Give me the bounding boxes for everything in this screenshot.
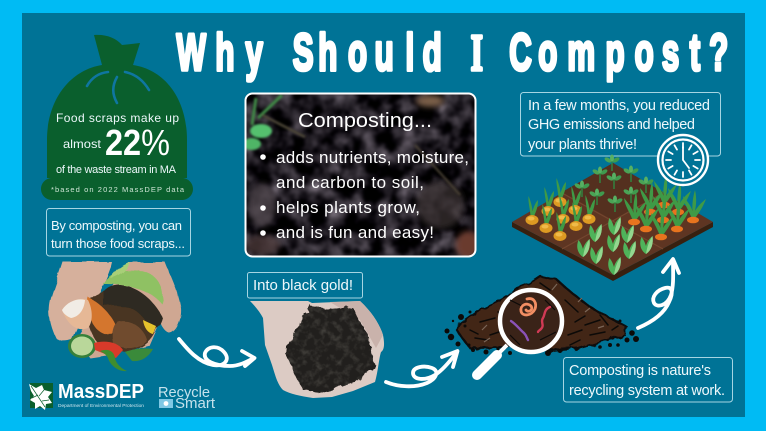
bullet list: and carbon to soil,: [276, 173, 424, 192]
onion plants: [526, 178, 596, 241]
logo: MassDEP: MassDEP: [58, 381, 144, 403]
carrot plants: [624, 175, 706, 240]
callout: into black gold: Into black gold!: [253, 277, 353, 294]
illustration: garden bed: [512, 154, 713, 281]
logo: RecycleSmart: Recycle: [158, 385, 210, 401]
food scraps: [87, 262, 164, 352]
bag shape: [41, 35, 193, 200]
bullet list: and is fun and easy!: [276, 223, 434, 242]
callout: by composting: By composting, you can: [51, 218, 182, 233]
scattered crumbs: [444, 310, 639, 356]
icon: clock: [658, 135, 708, 185]
seedling plants: [574, 154, 654, 212]
callout: in a few months: GHG emissions and helped: [528, 117, 695, 133]
panel: composting benefits: [243, 93, 480, 259]
bag footnote: *based on 2022 MassDEP data: [51, 185, 185, 194]
icon: green trash bag with statistic: [41, 35, 193, 200]
callout: by composting: [46, 208, 190, 256]
callout: nature's recycling system: recycling system at work.: [569, 383, 725, 399]
illustration: compost pile: [444, 276, 639, 375]
title: [176, 24, 728, 82]
title: Why: [177, 24, 263, 82]
magnifier lens: [500, 290, 562, 352]
red pepper: [94, 342, 123, 358]
soil cracks in lens: [510, 300, 556, 345]
compost mass: [285, 306, 375, 393]
yellow peel: [143, 320, 156, 334]
bullet list: helps plants grow,: [276, 198, 420, 217]
bag text: food scraps: Food scraps make up: [56, 111, 179, 125]
soil flecks: [470, 283, 618, 345]
eggshell: [62, 299, 92, 329]
arrow: black gold to compost pile: [386, 351, 458, 386]
callout: nature's recycling system: [564, 358, 732, 402]
title: Should: [293, 24, 442, 82]
callout: nature's recycling system: Composting is nature's: [569, 363, 711, 379]
green pepper: [100, 350, 127, 371]
callout: in a few months: your plants thrive!: [528, 137, 637, 153]
arrow: compost pile to garden: [638, 259, 679, 328]
statistic: 22 percent: 22%: [105, 122, 170, 163]
bullet list: adds nutrients, moisture,: [276, 148, 469, 167]
green scrap: [125, 348, 153, 361]
magnifier neck: [498, 345, 507, 354]
logo: RecycleSmart: [158, 385, 216, 412]
logo: MassDEP: Department of Environmental Protection: [58, 403, 145, 408]
cucumber slice: [68, 334, 96, 358]
bag crease highlights: [87, 72, 149, 103]
hands: [49, 262, 181, 358]
callout: into black gold: [248, 272, 362, 298]
logo: MassDEP: [29, 381, 145, 410]
leafy plants: [577, 217, 653, 275]
photo: hands holding food scraps: [49, 262, 181, 371]
title: Compost?: [509, 24, 728, 82]
callout: in a few months: [520, 92, 720, 156]
panel heading: Composting...: [298, 109, 432, 132]
logo: RecycleSmart: Smart: [175, 395, 216, 412]
callout: by composting: turn those food scraps...: [51, 236, 185, 251]
cupped hands: [250, 301, 384, 398]
worm: red: [538, 307, 550, 332]
worm: orange: [521, 299, 536, 315]
title: I: [471, 25, 483, 82]
bag text: waste stream: of the waste stream in MA: [56, 164, 177, 176]
bag text: almost: almost: [63, 137, 102, 151]
soil photo background: [243, 93, 480, 259]
pile: [455, 276, 627, 350]
soil plot: [512, 222, 713, 281]
arrow: scraps to black gold: [179, 339, 254, 366]
bullet list: [260, 148, 469, 242]
photo: hands holding black compost: [250, 301, 384, 398]
panel border: [246, 94, 476, 256]
magnifier handle: [477, 355, 497, 375]
callout: in a few months: In a few months, you reduced: [528, 98, 710, 114]
worm: purple: [511, 321, 528, 340]
